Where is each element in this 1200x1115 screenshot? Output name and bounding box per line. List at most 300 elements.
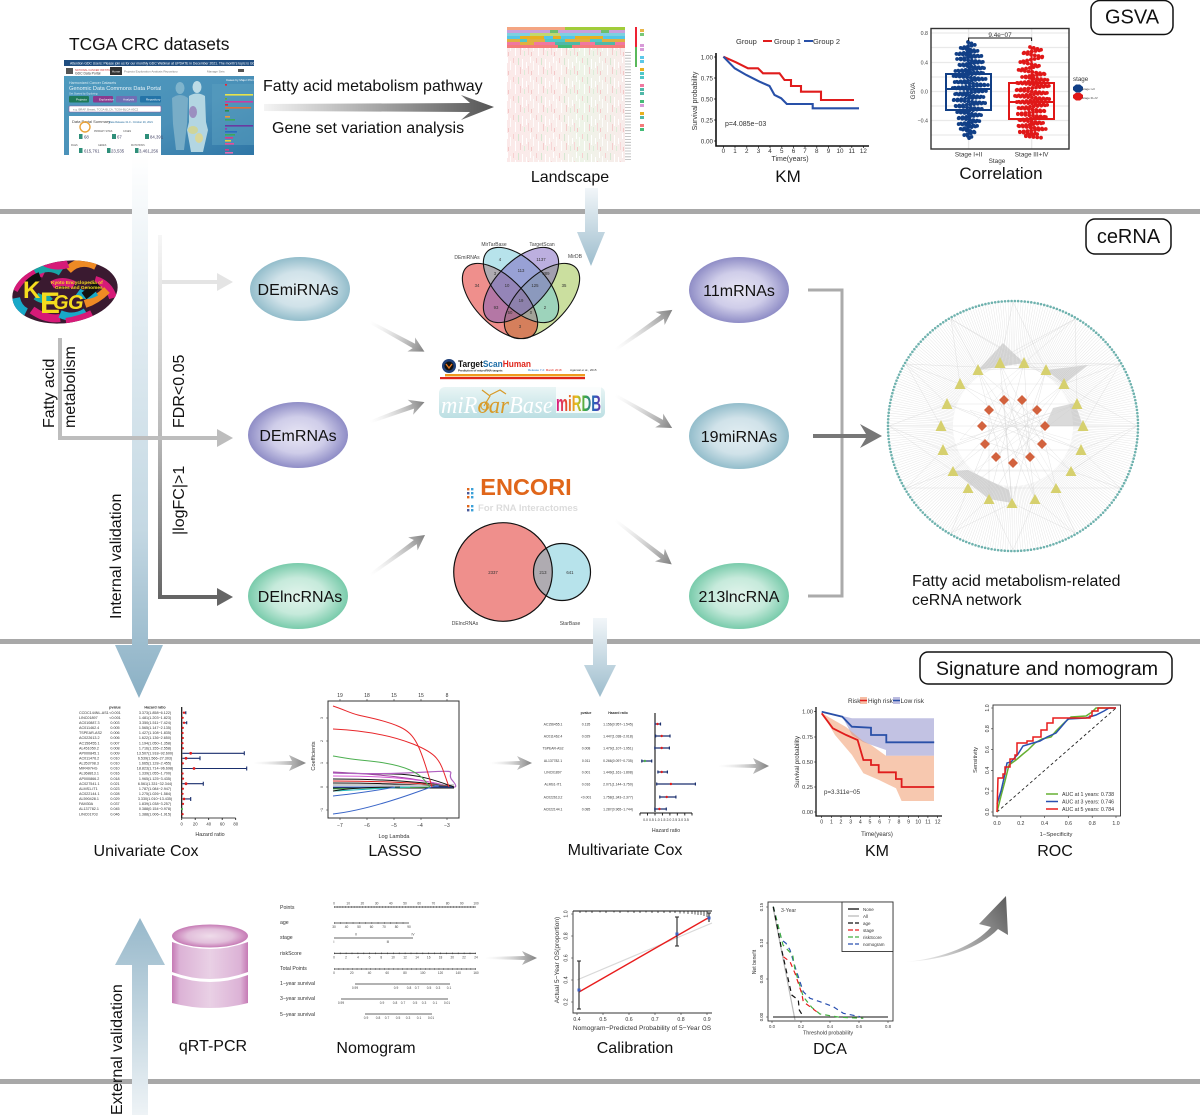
screenshot: GDC data portal: Exploration xyxy=(99,98,114,102)
chart: calibration: 0.6 xyxy=(564,954,570,962)
chart: multivariate Cox forest plot: 1.479(1.107−1.951) xyxy=(603,746,633,750)
two-set venn diagram: DElncRNAs xyxy=(452,621,479,627)
chart: LASSO coefficient paths: −1 xyxy=(320,808,324,812)
chart: univariate Cox forest plot: 0.018 xyxy=(110,777,120,781)
screenshot: GDC data portal: Projects Exploration Analysis Repository xyxy=(124,70,178,74)
chart: nomogram: 0.8 xyxy=(393,1001,397,1005)
node: DEmiRNAs xyxy=(250,257,350,321)
label: qRT-PCR: qRT-PCR xyxy=(179,1038,247,1055)
chart: univariate Cox forest plot: AP000866.2 xyxy=(79,777,99,781)
chart: nomogram: 14 xyxy=(415,956,419,960)
arrow: DEmiRNAs to databases xyxy=(366,315,428,359)
text: FDR threshold: FDR<0.05 xyxy=(171,355,188,428)
chart: calibration: 0.5 xyxy=(599,1017,607,1023)
ENCORI logo: ENCORI xyxy=(480,474,572,500)
chart: ROC curves: 0.4 xyxy=(1041,821,1048,827)
chart: top Kaplan-Meier: 1.00 xyxy=(701,54,713,62)
chart: top Kaplan-Meier: 0 xyxy=(722,148,726,155)
miRBase and miRDB logos: miRoarBase xyxy=(441,393,553,419)
chart: nomogram: 0.5 xyxy=(413,1001,417,1005)
two-set venn diagram: StarBase xyxy=(560,621,580,627)
arrow: encori to 213lncRNA xyxy=(610,514,677,571)
chart: decision curve analysis: 0.2 xyxy=(798,1024,805,1029)
chart: univariate Cox forest plot: <0.001 xyxy=(109,711,121,715)
chart: nomogram: 0.7 xyxy=(401,1001,405,1005)
node: DEmRNAs xyxy=(248,402,348,468)
text: fatty acid metabolism xyxy=(41,346,79,428)
text: fatty acid metabolism: metabolism xyxy=(62,346,79,428)
big arrow: pathway to landscape xyxy=(264,95,494,120)
chart: univariate Cox forest plot: AC010887.3 xyxy=(79,721,100,725)
chart: calibration: 0.8 xyxy=(564,932,570,940)
four-set venn diagram: 10 xyxy=(505,283,510,288)
TargetScan logo xyxy=(440,359,597,379)
chart: nomogram: 0.7 xyxy=(415,986,419,990)
four-set venn diagram: 3 xyxy=(519,324,522,329)
chart: univariate Cox forest plot: 0.008 xyxy=(110,746,120,750)
chart: risk Kaplan-Meier: High risk xyxy=(868,698,894,705)
chart: ROC curves: AUC at 3 years: 0.746 xyxy=(1062,800,1114,806)
screenshot: GDC data portal: PRIMARY SITES xyxy=(94,130,113,133)
internal validation gradient arrow xyxy=(115,155,163,698)
chart: decision curve analysis: 0.00 xyxy=(759,1012,764,1021)
chart: risk Kaplan-Meier: p=3.311e−05 xyxy=(824,789,861,796)
chart: univariate Cox forest plot: CCDC144NL-AS1 xyxy=(79,711,109,715)
chart: nomogram xyxy=(280,902,479,1020)
chart: univariate Cox forest plot: AC011476.2 xyxy=(79,756,99,760)
chart: univariate Cox forest plot: 0.037 xyxy=(110,802,120,806)
chart: calibration xyxy=(554,910,712,1032)
screenshot: GDC data portal: MUTATIONS xyxy=(131,144,145,147)
chart: GSVA correlation boxplot: −0.4 xyxy=(918,118,928,124)
chart: nomogram: 18 xyxy=(439,956,442,960)
label: multivariate cox: Multivariate Cox xyxy=(568,842,682,859)
screenshot: GDC data portal: 615,761 xyxy=(84,148,100,154)
chart: top Kaplan-Meier: 1 xyxy=(733,148,737,155)
chart: nomogram: 16 xyxy=(427,956,431,960)
screenshot: GDC data portal: GENES xyxy=(98,144,107,147)
chart: top Kaplan-Meier xyxy=(692,37,869,163)
KEGG logo: E xyxy=(40,287,60,320)
chart: top Kaplan-Meier: 0.75 xyxy=(701,76,713,82)
two-set venn diagram: 641 xyxy=(566,570,574,575)
chart: LASSO coefficient paths: −6 xyxy=(364,823,370,829)
chart: nomogram: 4 xyxy=(357,956,359,960)
chart: nomogram: 20 xyxy=(451,956,454,960)
chart: decision curve analysis: riskScore xyxy=(863,935,882,940)
chart: multivariate Cox forest plot: AC156455.1 xyxy=(544,722,563,726)
screenshot: GDC data portal: Repository xyxy=(146,98,161,102)
chart: univariate Cox forest plot: FAM30A xyxy=(79,802,94,806)
KEGG logo: G xyxy=(68,292,84,314)
chart: univariate Cox forest plot: 1.565(1.147−2.135) xyxy=(139,726,171,730)
chart: univariate Cox forest plot: AP000845.1 xyxy=(79,752,99,756)
chart: univariate Cox forest plot: 0.028 xyxy=(110,792,120,796)
icon: qRT-PCR database cylinder xyxy=(172,924,248,1008)
miRBase and miRDB logos xyxy=(439,387,605,419)
chart: calibration: 0.6 xyxy=(625,1017,633,1023)
chart: univariate Cox forest plot: 1.481(1.203−1.823) xyxy=(139,716,171,720)
chart: GSVA correlation boxplot: 0.4 xyxy=(921,60,928,66)
chart: nomogram: 8 xyxy=(380,956,382,960)
chart: nomogram: 50 xyxy=(403,902,407,906)
chart: LASSO coefficient paths: 15 xyxy=(391,693,397,699)
chart: multivariate Cox forest plot: 1.287(0.965−1.744) xyxy=(603,808,633,812)
chart: nomogram: 10 xyxy=(346,902,350,906)
chart: risk Kaplan-Meier: Risk xyxy=(848,698,861,705)
chart: top Kaplan-Meier: 4 xyxy=(768,148,772,155)
four-set venn diagram: 0 xyxy=(530,310,533,315)
chart: univariate Cox forest plot: 1.716(1.155−2.558) xyxy=(139,746,171,750)
chart: nomogram: 0.3 xyxy=(406,1016,410,1020)
four-set venn diagram: 1137 xyxy=(536,257,546,262)
chart: nomogram: 2 xyxy=(345,956,347,960)
node: DElncRNAs xyxy=(248,563,348,629)
label: landscape: Landscape xyxy=(531,169,609,186)
chart: nomogram: 60 xyxy=(370,925,373,929)
chart: nomogram: Total Points xyxy=(280,966,307,972)
label: calibration: Calibration xyxy=(597,1040,673,1057)
chart: decision curve analysis: stage xyxy=(863,928,875,933)
chart: nomogram: 80 xyxy=(395,925,398,929)
four-set venn diagram: 34 xyxy=(475,283,480,288)
chart: decision curve analysis: 0.4 xyxy=(827,1024,834,1029)
section divider lines xyxy=(0,209,1200,1084)
chart: LASSO coefficient paths xyxy=(311,693,459,840)
screenshot: GDC data portal: 67 xyxy=(117,134,122,140)
badge: signature and nomogram: Signature and nomogram xyxy=(936,658,1158,680)
chart: calibration: Nomogram−Predicted Probability of 5−Year OS xyxy=(573,1025,712,1032)
chart: decision curve analysis: age xyxy=(863,921,871,926)
chart: univariate Cox forest plot: 0.007 xyxy=(110,741,120,745)
ENCORI logo xyxy=(467,474,578,514)
chart: nomogram: 0.3 xyxy=(436,986,440,990)
four-set venn diagram: MirDB xyxy=(568,254,583,260)
chart: univariate Cox forest plot: 0.388(0.154−0.978) xyxy=(139,807,171,811)
four-set venn diagram: 2 xyxy=(544,305,547,310)
chart: nomogram: 0.8 xyxy=(407,986,411,990)
TargetScan logo: Release 7.2: March 2018 xyxy=(528,368,562,372)
chart: univariate Cox forest plot: 1.388(1.006−1.915) xyxy=(139,812,171,816)
chart: decision curve analysis: Net benefit xyxy=(752,949,758,974)
chart: GSVA correlation boxplot: Stage I+II xyxy=(1082,87,1095,91)
chart: top Kaplan-Meier: 10 xyxy=(836,148,844,155)
node: 19miRNAs xyxy=(689,403,789,469)
screenshot: GDC data portal: Data Portal Summary xyxy=(72,119,110,124)
arrow: to network xyxy=(813,424,882,448)
chart: univariate Cox forest plot: 1.665(1.128−2.455) xyxy=(139,762,171,766)
chart: multivariate Cox forest plot: AC022144.1 xyxy=(544,808,563,812)
chart: LASSO coefficient paths: 1 xyxy=(320,762,324,764)
chart: multivariate Cox forest plot: ALMS1-IT1 xyxy=(544,782,562,786)
chart: univariate Cox forest plot: 6.539(1.566−27.303) xyxy=(138,756,172,760)
chart: risk Kaplan-Meier: 5 xyxy=(869,820,872,826)
chart: nomogram: 0.1 xyxy=(433,1001,437,1005)
chart: LASSO coefficient paths: 2 xyxy=(320,740,324,742)
four-set venn diagram: TargetScan xyxy=(529,242,555,248)
chart: multivariate Cox forest plot xyxy=(542,711,695,834)
chart: nomogram: 22 xyxy=(462,956,466,960)
chart: top Kaplan-Meier: Group 2 xyxy=(813,37,840,46)
arrow: encori to multivariate cox xyxy=(584,618,616,697)
chart: decision curve analysis: 3-Year xyxy=(781,908,796,914)
chart: nomogram: 0.8 xyxy=(376,1016,380,1020)
chart: univariate Cox forest plot: 0.045 xyxy=(110,807,120,811)
two-set venn diagram xyxy=(452,523,590,627)
chart: top Kaplan-Meier: 6 xyxy=(792,148,796,155)
chart: univariate Cox forest plot: 18.823(1.714−96.698) xyxy=(137,767,173,771)
chart: multivariate Cox forest plot: 0.135 xyxy=(582,722,590,726)
chart: multivariate Cox forest plot: 0.266(0.097−0.735) xyxy=(603,759,633,763)
chart: univariate Cox forest plot: Hazard ratio xyxy=(144,706,166,710)
screenshot: GDC data portal: 84,391 xyxy=(150,134,164,140)
screenshot: GDC data portal: 68 xyxy=(84,134,89,140)
chart: decision curve analysis: nomogram xyxy=(863,942,885,947)
network: ceRNA xyxy=(888,301,1138,551)
chart: multivariate Cox forest plot: LINC01897 xyxy=(544,770,562,774)
chart: multivariate Cox forest plot: 0.016 xyxy=(582,782,590,786)
chart: univariate Cox forest plot: LINC01703 xyxy=(79,812,98,816)
chart: calibration: 1.0 xyxy=(564,910,570,918)
four-set venn diagram: 93 xyxy=(494,305,499,310)
TargetScan logo: Agarwal et al., 2015 xyxy=(570,368,597,372)
chart: LASSO coefficient paths: Log Lambda xyxy=(378,834,410,840)
chart: top Kaplan-Meier: p=4.085e−03 xyxy=(725,121,766,128)
screenshot: GDC data portal: e.g. BRAF, Breast, TCGA-BLCA, TCGA-BLCA-A5C2 xyxy=(73,108,139,112)
screenshot: GDC data portal: Projects xyxy=(76,98,87,102)
chart: decision curve analysis: 0.15 xyxy=(759,902,764,911)
chart: nomogram: 0.9 xyxy=(364,1016,368,1020)
chart: risk Kaplan-Meier xyxy=(794,697,942,838)
chart: multivariate Cox forest plot: 0.029 xyxy=(582,734,590,738)
chart: univariate Cox forest plot: 1.427(1.108−1.835) xyxy=(139,731,171,735)
four-set venn diagram: 889 xyxy=(542,271,550,276)
chart: calibration: 0.8 xyxy=(677,1017,685,1023)
chart: multivariate Cox forest plot: 1.758(1.343−2.377) xyxy=(603,796,633,800)
chart: ROC curves: 0.2 xyxy=(1017,821,1025,827)
chart: univariate Cox forest plot: <0.001 xyxy=(109,716,121,720)
chart: GSVA correlation boxplot: 0.8 xyxy=(921,31,928,37)
chart: LASSO coefficient paths: 0 xyxy=(320,786,324,788)
chart: risk Kaplan-Meier: 7 xyxy=(888,820,891,826)
chart: ROC curves: 0.6 xyxy=(985,746,991,753)
arrow: databases to 11mRNAs xyxy=(610,303,677,357)
chart: risk Kaplan-Meier: 1.00 xyxy=(802,710,813,716)
chart: univariate Cox forest plot: 6.561(1.331−32.344) xyxy=(138,782,172,786)
two-set venn diagram: 2337 xyxy=(488,570,498,575)
chart: univariate Cox forest plot: 0.046 xyxy=(110,812,120,816)
chart: univariate Cox forest plot: 0.010 xyxy=(110,767,120,771)
heatmap: landscape xyxy=(507,27,644,162)
screenshot: GDC data portal: Cases by Major Primary xyxy=(226,78,259,82)
node: 11mRNAs xyxy=(689,257,789,323)
four-set venn diagram xyxy=(449,234,593,352)
chart: nomogram: 80 xyxy=(446,902,450,906)
chart: ROC curves: 0.6 xyxy=(1065,821,1072,827)
chart: decision curve analysis xyxy=(752,902,893,1036)
chart: nomogram: 3−year survival xyxy=(280,996,315,1002)
chart: multivariate Cox forest plot: 0.011 xyxy=(582,759,590,763)
chart: LASSO coefficient paths: −3 xyxy=(444,823,450,829)
heading: TCGA CRC datasets: TCGA CRC datasets xyxy=(69,34,230,54)
screenshot: GDC data portal: GDC Data Portal xyxy=(75,72,101,76)
chart: multivariate Cox forest plot: pvalue xyxy=(581,711,591,715)
chart: nomogram: 40 xyxy=(389,902,393,906)
chart: ROC curves xyxy=(973,704,1120,838)
arrow: univariate to lasso xyxy=(253,755,306,771)
chart: GSVA correlation boxplot: 0.0 xyxy=(921,90,928,96)
chart: ROC curves: 0.8 xyxy=(1089,821,1096,827)
chart: univariate Cox forest plot: 80 xyxy=(233,822,239,826)
chart: ROC curves: AUC at 1 years: 0.738 xyxy=(1062,792,1114,798)
chart: univariate Cox forest plot: Hazard ratio xyxy=(195,832,225,838)
chart: nomogram: II xyxy=(355,932,357,936)
chart: nomogram: 40 xyxy=(368,971,371,975)
chart: calibration: 0.9 xyxy=(703,1017,711,1023)
chart: multivariate Cox forest plot: AC022613.2 xyxy=(544,796,563,800)
chart: top Kaplan-Meier: Time(years) xyxy=(771,156,809,163)
arrow: DElncRNAs to encori xyxy=(365,529,430,581)
chart: risk Kaplan-Meier: 0.00 xyxy=(802,810,813,816)
chart: nomogram: 40 xyxy=(345,925,348,929)
chart: nomogram: 100 xyxy=(473,902,479,906)
chart: univariate Cox forest plot: AL353708.3 xyxy=(79,762,99,766)
screenshot: GDC data portal: Home xyxy=(112,70,120,74)
chart: risk Kaplan-Meier: 2 xyxy=(840,820,843,826)
chart: multivariate Cox forest plot: Hazard ratio xyxy=(608,711,628,715)
chart: decision curve analysis: 0.05 xyxy=(759,974,764,983)
node: 11mRNAs: 11mRNAs xyxy=(703,283,775,300)
chart: univariate Cox forest plot: 1.839(1.038−3.257) xyxy=(139,802,171,806)
chart: univariate Cox forest plot: 60 xyxy=(220,822,225,826)
chart: nomogram: 80 xyxy=(403,971,407,975)
chart: LASSO coefficient paths: 3 xyxy=(320,717,324,719)
chart: univariate Cox forest plot xyxy=(79,706,247,838)
chart: risk Kaplan-Meier: 4 xyxy=(859,820,862,826)
chart: univariate Cox forest plot: 0.010 xyxy=(110,762,120,766)
chart: GSVA correlation boxplot: 9.4e−07 xyxy=(988,32,1012,39)
chart: top Kaplan-Meier: 3 xyxy=(757,148,761,155)
chart: nomogram: 10 xyxy=(391,956,395,960)
chart: nomogram: 0.01 xyxy=(444,1001,450,1005)
chart: univariate Cox forest plot: LINC01897 xyxy=(79,716,98,720)
chart: univariate Cox forest plot: 0.009 xyxy=(110,752,120,756)
chart: multivariate Cox forest plot: 0.008 xyxy=(582,746,590,750)
chart: multivariate Cox forest plot: 0.0 0.5 1.0 1.5 2.0 2.5 3.0 3.5 xyxy=(643,818,689,822)
chart: GSVA correlation boxplot xyxy=(910,28,1098,165)
chart: univariate Cox forest plot: AL590428.1 xyxy=(79,797,99,801)
chart: LASSO coefficient paths: 18 xyxy=(364,693,370,699)
chart: nomogram: IV xyxy=(411,932,415,936)
chart: decision curve analysis: None xyxy=(863,907,874,912)
chart: top Kaplan-Meier: 2 xyxy=(745,148,749,155)
arrow: DEmRNAs to databases xyxy=(367,395,427,430)
four-set venn diagram: DEmiRNAs xyxy=(454,255,480,261)
chart: GSVA correlation boxplot: Stage III+IV xyxy=(1015,152,1049,158)
chart: top Kaplan-Meier: 0.50 xyxy=(701,96,713,104)
chart: LASSO coefficient paths: −7 xyxy=(337,823,343,829)
chart: nomogram: 20 xyxy=(350,971,354,975)
screenshot: GDC data portal: Data Release 31.0 - October 29, 2021 xyxy=(109,120,153,124)
chart: ROC curves: AUC at 5 years: 0.784 xyxy=(1062,807,1114,813)
arrow: lasso to multivariate xyxy=(490,756,532,770)
label: KM risk: KM xyxy=(865,843,889,860)
screenshot: GDC data portal: Get Started by Exploring: xyxy=(69,92,98,96)
chart: nomogram: 0.9 xyxy=(380,1001,384,1005)
chart: risk Kaplan-Meier: 0.50 xyxy=(802,760,813,766)
text: fatty acid metabolism: Fatty acid xyxy=(41,359,58,428)
arrow: landscape to venn xyxy=(577,188,605,266)
chart: univariate Cox forest plot: 0.021 xyxy=(110,782,120,786)
chart: nomogram: 60 xyxy=(417,902,421,906)
miRBase and miRDB logos: miRDB xyxy=(556,391,601,416)
chart: nomogram: 0 xyxy=(333,902,335,906)
chart: nomogram: 0.01 xyxy=(428,1016,434,1020)
two-set venn diagram: 213 xyxy=(539,570,547,575)
four-set venn diagram: 19 xyxy=(519,298,524,303)
chart: nomogram: 20 xyxy=(361,902,364,906)
chart: nomogram: 90 xyxy=(407,925,411,929)
chart: univariate Cox forest plot: pvalue xyxy=(109,706,121,710)
chart: nomogram: 60 xyxy=(386,971,389,975)
chart: top Kaplan-Meier: 0.00 xyxy=(701,138,713,146)
chart: univariate Cox forest plot: 0 xyxy=(181,822,184,826)
chart: univariate Cox forest plot: 1.194(1.050−1.358) xyxy=(139,741,171,745)
chart: top Kaplan-Meier: Group 1 xyxy=(774,37,801,46)
chart: univariate Cox forest plot: 13.507(1.918−92.600) xyxy=(137,752,173,756)
chart: LASSO coefficient paths: Coefficients xyxy=(311,741,317,771)
node: 213lncRNA: 213lncRNA xyxy=(699,589,780,606)
chart: nomogram: 5−year survival xyxy=(280,1012,315,1018)
screenshot: GDC data portal xyxy=(64,60,322,155)
chart: multivariate Cox forest plot: 0.001 xyxy=(582,770,590,774)
chart: risk Kaplan-Meier: Survival probability xyxy=(794,735,801,788)
chart: top Kaplan-Meier: 5 xyxy=(780,148,784,155)
chart: univariate Cox forest plot: AC156455.1 xyxy=(79,741,100,745)
chart: univariate Cox forest plot: 40 xyxy=(206,822,212,826)
arrow: to DElncRNAs xyxy=(158,588,233,606)
badge: GSVA xyxy=(1091,0,1173,34)
text: internal validation: Internal validation xyxy=(108,494,125,619)
chart: ROC curves: 0.0 xyxy=(985,808,991,816)
chart: decision curve analysis: 0.6 xyxy=(856,1024,863,1029)
chart: univariate Cox forest plot: 0.029 xyxy=(110,797,120,801)
label: ROC: ROC xyxy=(1037,843,1073,860)
screenshot: GDC data portal: Analysis xyxy=(123,98,135,102)
text: network caption: Fatty acid metabolism-related xyxy=(912,573,1120,590)
chart: univariate Cox forest plot: 1.275(1.026−1.584) xyxy=(139,792,171,796)
chart: decision curve analysis: 0.0 xyxy=(769,1024,776,1029)
badge: GSVA: GSVA xyxy=(1105,6,1160,28)
chart: univariate Cox forest plot: MIR497HG xyxy=(79,767,98,771)
label: KM: KM xyxy=(775,167,801,186)
chart: nomogram: 30 xyxy=(332,925,336,929)
node: 19miRNAs: 19miRNAs xyxy=(701,429,777,446)
node: 213lncRNA xyxy=(689,563,789,629)
chart: univariate Cox forest plot: 1.339(1.055−1.700) xyxy=(139,772,171,776)
chart: nomogram: 0.9 xyxy=(394,986,398,990)
chart: multivariate Cox forest plot: <0.001 xyxy=(581,796,591,800)
chart: ROC curves: 0.0 xyxy=(993,821,1001,827)
chart: nomogram: 30 xyxy=(375,902,379,906)
four-set venn diagram: 125 xyxy=(531,283,539,288)
chart: nomogram: 0.3 xyxy=(422,1001,426,1005)
badge: ceRNA xyxy=(1086,219,1171,254)
chart: risk Kaplan-Meier: 9 xyxy=(907,820,910,826)
chart: top Kaplan-Meier: 9 xyxy=(827,148,831,155)
label: univariate cox: Univariate Cox xyxy=(94,843,198,860)
chart: nomogram: 0.99 xyxy=(338,1001,344,1005)
